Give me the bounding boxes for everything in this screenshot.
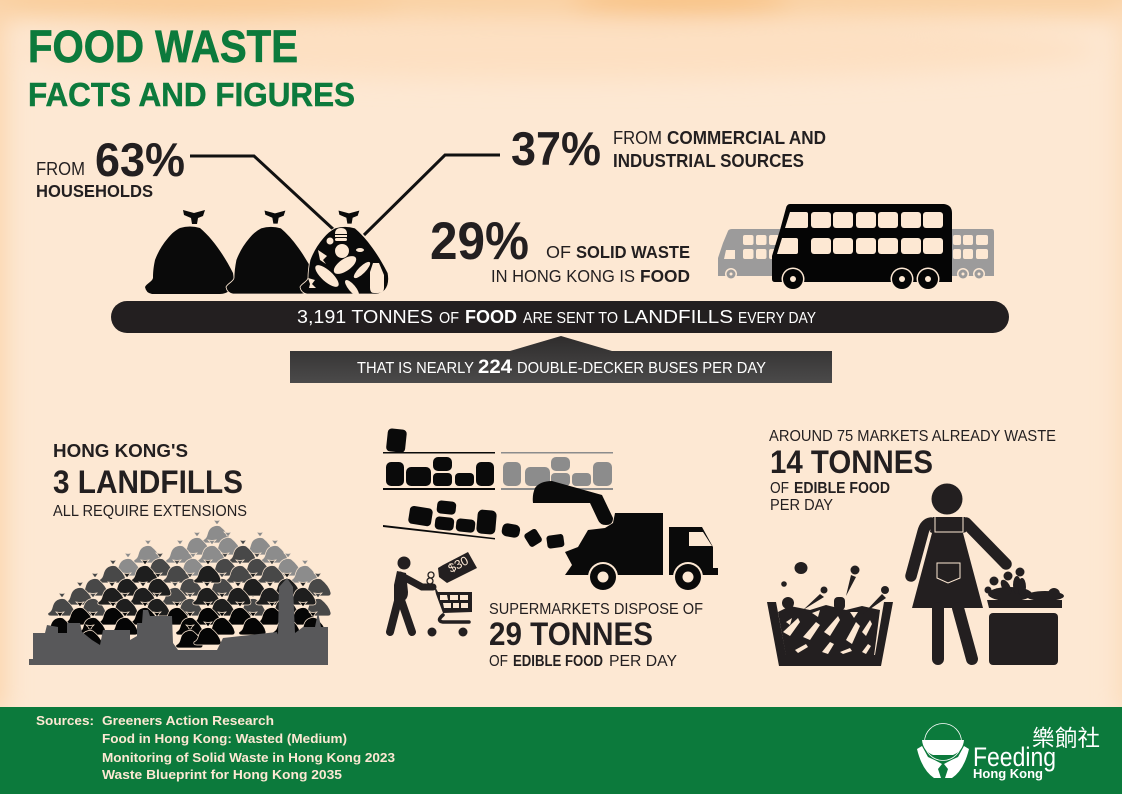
callout: 224 double-decker buses: DOUBLE-DECKER BUSES PER DAY	[517, 360, 766, 377]
icon: price tag: $30	[446, 553, 471, 576]
text: 75 markets waste 14 tonnes: EDIBLE FOOD	[794, 480, 890, 497]
banner: tonnes sent to landfills: EVERY DAY	[738, 310, 816, 327]
banner: tonnes sent to landfills: 3,191 TONNES	[297, 307, 433, 327]
stat: 63% from households: HOUSEHOLDS	[36, 181, 153, 201]
icon: city skyline	[29, 578, 328, 665]
sources list	[36, 713, 395, 782]
stat: 63% from households: 63%	[95, 133, 185, 186]
sources list: Greeners Action Research	[102, 713, 274, 728]
logo: Feeding Hong Kong: Hong Kong	[973, 767, 1043, 781]
icon: produce crate on stand	[984, 568, 1064, 665]
shelf: grey items	[501, 452, 613, 490]
text: Hong Kong's 3 landfills	[53, 440, 247, 520]
title: FOOD WASTE	[28, 21, 298, 72]
text: 75 markets waste 14 tonnes: AROUND 75 MARKETS ALREADY WASTE	[769, 428, 1056, 445]
stat: 37% commercial and industrial	[511, 122, 826, 175]
icon: black bag two	[226, 210, 315, 294]
sources list: Monitoring of Solid Waste in Hong Kong 2023	[102, 750, 395, 765]
stat: 29% of solid waste is food: SOLID WASTE	[576, 242, 690, 262]
shelf: black items	[383, 428, 495, 490]
text: supermarkets dispose of 29 tonnes: PER DAY	[609, 653, 677, 670]
stat: 37% commercial and industrial: 37%	[511, 122, 601, 175]
stat: 37% commercial and industrial: FROM	[613, 128, 662, 148]
text: Hong Kong's 3 landfills: ALL REQUIRE EXTENSIONS	[53, 503, 247, 520]
stat: 37% commercial and industrial: COMMERCIAL AND	[667, 128, 826, 148]
stat: 63% from households	[36, 133, 185, 201]
stat: 29% of solid waste is food: OF	[546, 242, 571, 262]
banner: tonnes sent to landfills: LANDFILLS	[623, 307, 733, 327]
icon: supermarket shelves	[383, 428, 613, 549]
title: FACTS AND FIGURES	[28, 77, 355, 114]
footer band	[0, 707, 1122, 794]
stat: 37% commercial and industrial: INDUSTRIAL SOURCES	[613, 151, 804, 171]
banner: tonnes sent to landfills	[111, 301, 1009, 333]
text: Hong Kong's 3 landfills: 3 LANDFILLS	[53, 464, 243, 500]
logo: Feeding Hong Kong: 樂餉社	[1032, 726, 1100, 751]
text: Hong Kong's 3 landfills: HONG KONG'S	[53, 440, 188, 461]
icon: pile of garbage bags	[46, 520, 331, 648]
text: 75 markets waste 14 tonnes: PER DAY	[770, 497, 833, 514]
stat: 29% of solid waste is food	[430, 212, 690, 286]
icon: garbage truck	[533, 481, 718, 592]
text: supermarkets dispose of 29 tonnes: EDIBLE FOOD	[513, 653, 603, 670]
leader line: commercial to bag	[364, 155, 500, 235]
shelf: tilted with falling items	[383, 500, 565, 549]
icon: bag filled with food	[300, 210, 389, 298]
text: supermarkets dispose of 29 tonnes: 29 TONNES	[489, 616, 653, 652]
text: 75 markets waste 14 tonnes: OF	[770, 480, 789, 497]
banner: tonnes sent to landfills: FOOD	[465, 307, 517, 327]
icon: black double-decker bus	[772, 204, 952, 290]
leader line: households to bag	[190, 156, 333, 229]
text: 75 markets waste 14 tonnes	[769, 428, 1056, 514]
stat: 63% from households: FROM	[36, 159, 85, 179]
logo: Feeding Hong Kong: Feeding	[973, 742, 1056, 772]
banner: tonnes sent to landfills: OF	[439, 310, 459, 327]
callout: 224 double-decker buses	[290, 336, 832, 383]
text: 75 markets waste 14 tonnes: 14 TONNES	[770, 444, 933, 480]
stat: 29% of solid waste is food: 29%	[430, 212, 529, 271]
callout: 224 double-decker buses: THAT IS NEARLY	[357, 360, 474, 377]
text: supermarkets dispose of 29 tonnes: SUPERMARKETS DISPOSE OF	[489, 601, 703, 618]
callout: 224 double-decker buses: 224	[478, 357, 512, 378]
text: supermarkets dispose of 29 tonnes: OF	[489, 653, 508, 670]
text: supermarkets dispose of 29 tonnes	[489, 601, 703, 670]
banner: tonnes sent to landfills: ARE SENT TO	[523, 310, 618, 327]
sources list: Food in Hong Kong: Wasted (Medium)	[102, 731, 347, 746]
icon: bowl in hands	[917, 724, 969, 778]
icon: black bag one	[145, 210, 234, 294]
icon: vendor in apron	[911, 484, 1006, 659]
sources list: Waste Blueprint for Hong Kong 2035	[102, 767, 342, 782]
stat: 29% of solid waste is food: FOOD	[640, 266, 690, 286]
icon: grey double-decker buses	[718, 229, 994, 280]
icon: three garbage bags	[145, 210, 389, 298]
sources list: Sources:	[36, 713, 94, 728]
title	[28, 21, 355, 114]
logo: Feeding Hong Kong	[917, 724, 1100, 781]
icon: shopper with cart and price tag	[390, 552, 477, 636]
icon: basket of vegetables	[767, 562, 893, 666]
stat: 29% of solid waste is food: IN HONG KONG IS	[491, 266, 635, 286]
